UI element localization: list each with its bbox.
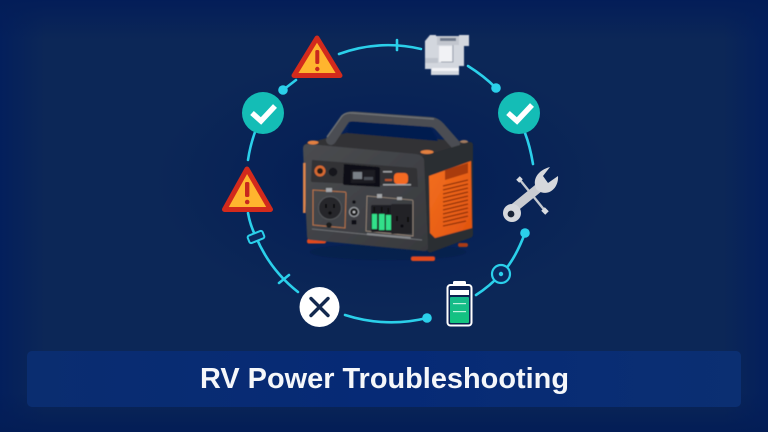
display screen <box>343 164 380 187</box>
power station device <box>303 113 473 261</box>
AC outlet left <box>313 188 346 228</box>
device side dark <box>423 142 473 252</box>
USB ports panel <box>366 194 413 236</box>
icon: appliance part <box>425 35 469 75</box>
panel: orange side plate <box>429 161 472 238</box>
panel: device front <box>303 144 428 251</box>
icon: warning triangle top <box>294 38 340 76</box>
troubleshooting ring of connector lines <box>247 40 533 323</box>
upper control panel <box>311 160 418 187</box>
left orange strip <box>303 163 306 213</box>
center DC ports <box>350 200 358 224</box>
AC outlet right <box>391 204 412 234</box>
device top <box>303 132 473 157</box>
device feet <box>307 239 468 261</box>
port: orange round socket <box>314 166 337 176</box>
corner caps <box>308 140 468 154</box>
icon: wrench and screwdriver <box>503 167 558 222</box>
icon: battery <box>448 281 472 326</box>
orange power button <box>383 171 411 186</box>
title banner <box>27 351 741 407</box>
icon: warning triangle left <box>224 169 270 210</box>
title: RV Power Troubleshooting <box>200 363 569 395</box>
icon: check badge left <box>242 92 284 134</box>
device handle <box>327 113 455 144</box>
handle opening <box>347 121 438 141</box>
device shadow <box>310 244 466 260</box>
bottom label strip <box>312 229 422 240</box>
icon: check badge right <box>498 92 540 134</box>
icon: close badge <box>300 287 340 327</box>
